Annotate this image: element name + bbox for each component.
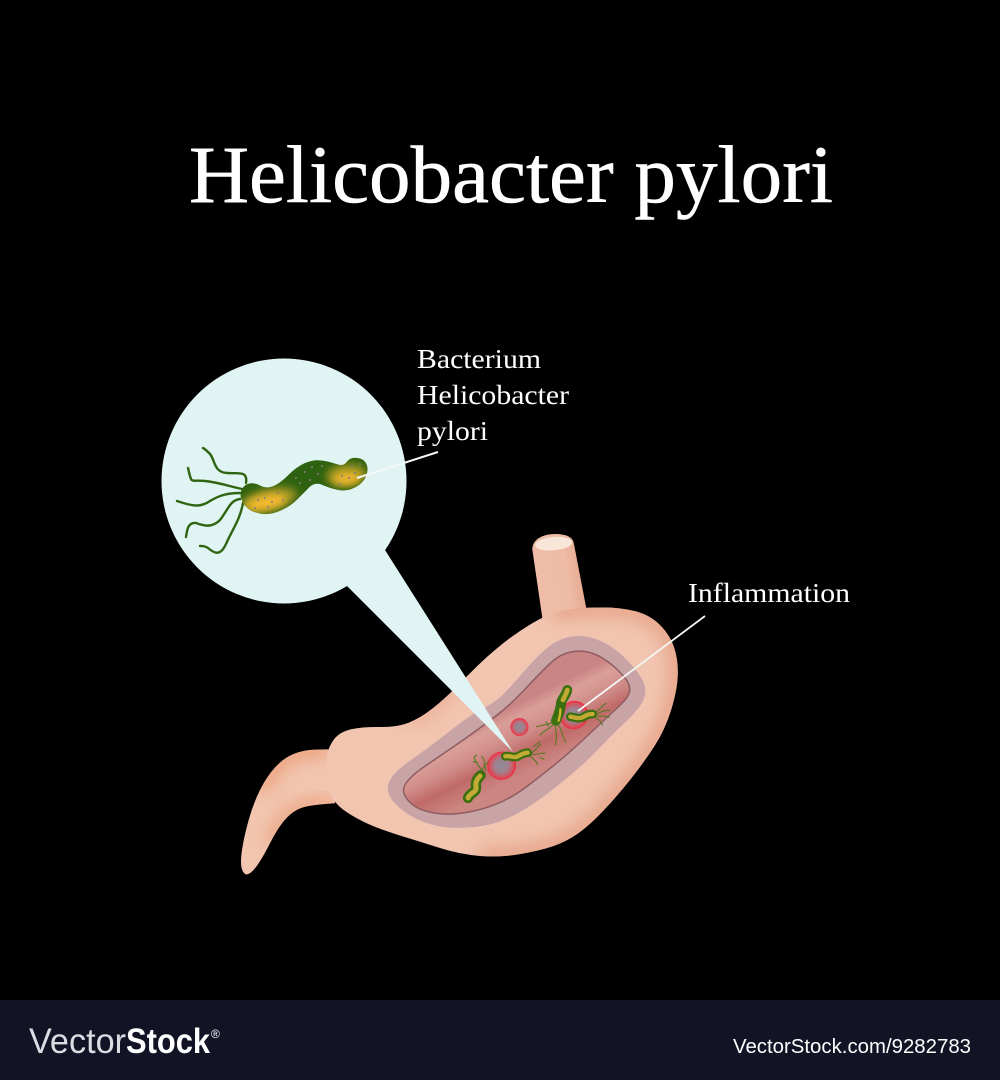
spot: small centre [508,715,531,739]
bacterium body [240,458,368,514]
body glow: left olive [241,482,301,514]
title: Helicobacter pylori [189,129,833,220]
inflammation spots [482,695,594,785]
stomach wall band [388,636,645,828]
label: bacterium: Bacterium [417,344,541,374]
magnifier callout bubble [162,358,513,752]
label: inflammation: Inflammation [688,578,851,608]
body glow: right [332,470,361,486]
esophagus [532,534,587,620]
flagella [177,448,246,553]
stomach illustration [233,534,687,880]
footer logo [29,1022,210,1061]
body speckles [254,463,361,509]
footer logo: Stock [126,1022,210,1061]
label: bacterium: Helicobacter [417,380,569,410]
bacterium: lower centre [505,742,545,765]
stomach body [320,600,687,863]
footer registered mark: ® [211,1027,220,1041]
spot: upper [554,695,594,735]
bacterium: bottom-left [468,755,488,798]
spot: lower [482,746,521,785]
bacterium: upper [537,690,567,745]
small bacteria [468,690,610,798]
stomach inner lining [403,651,630,814]
leader line: inflammation [578,616,705,711]
icon: large bacterium [177,448,373,553]
pylorus tail [241,749,335,874]
leader line: bacterium [357,452,438,478]
label: bacterium [417,344,569,446]
label: bacterium: pylori [417,416,488,446]
bacterium: right [570,703,610,725]
body glow: left [245,491,288,514]
body glow: right olive [325,462,368,488]
footer bar [0,1000,1000,1080]
footer image id: VectorStock.com/9282783 [733,1036,971,1058]
footer logo: Vector [29,1022,126,1061]
